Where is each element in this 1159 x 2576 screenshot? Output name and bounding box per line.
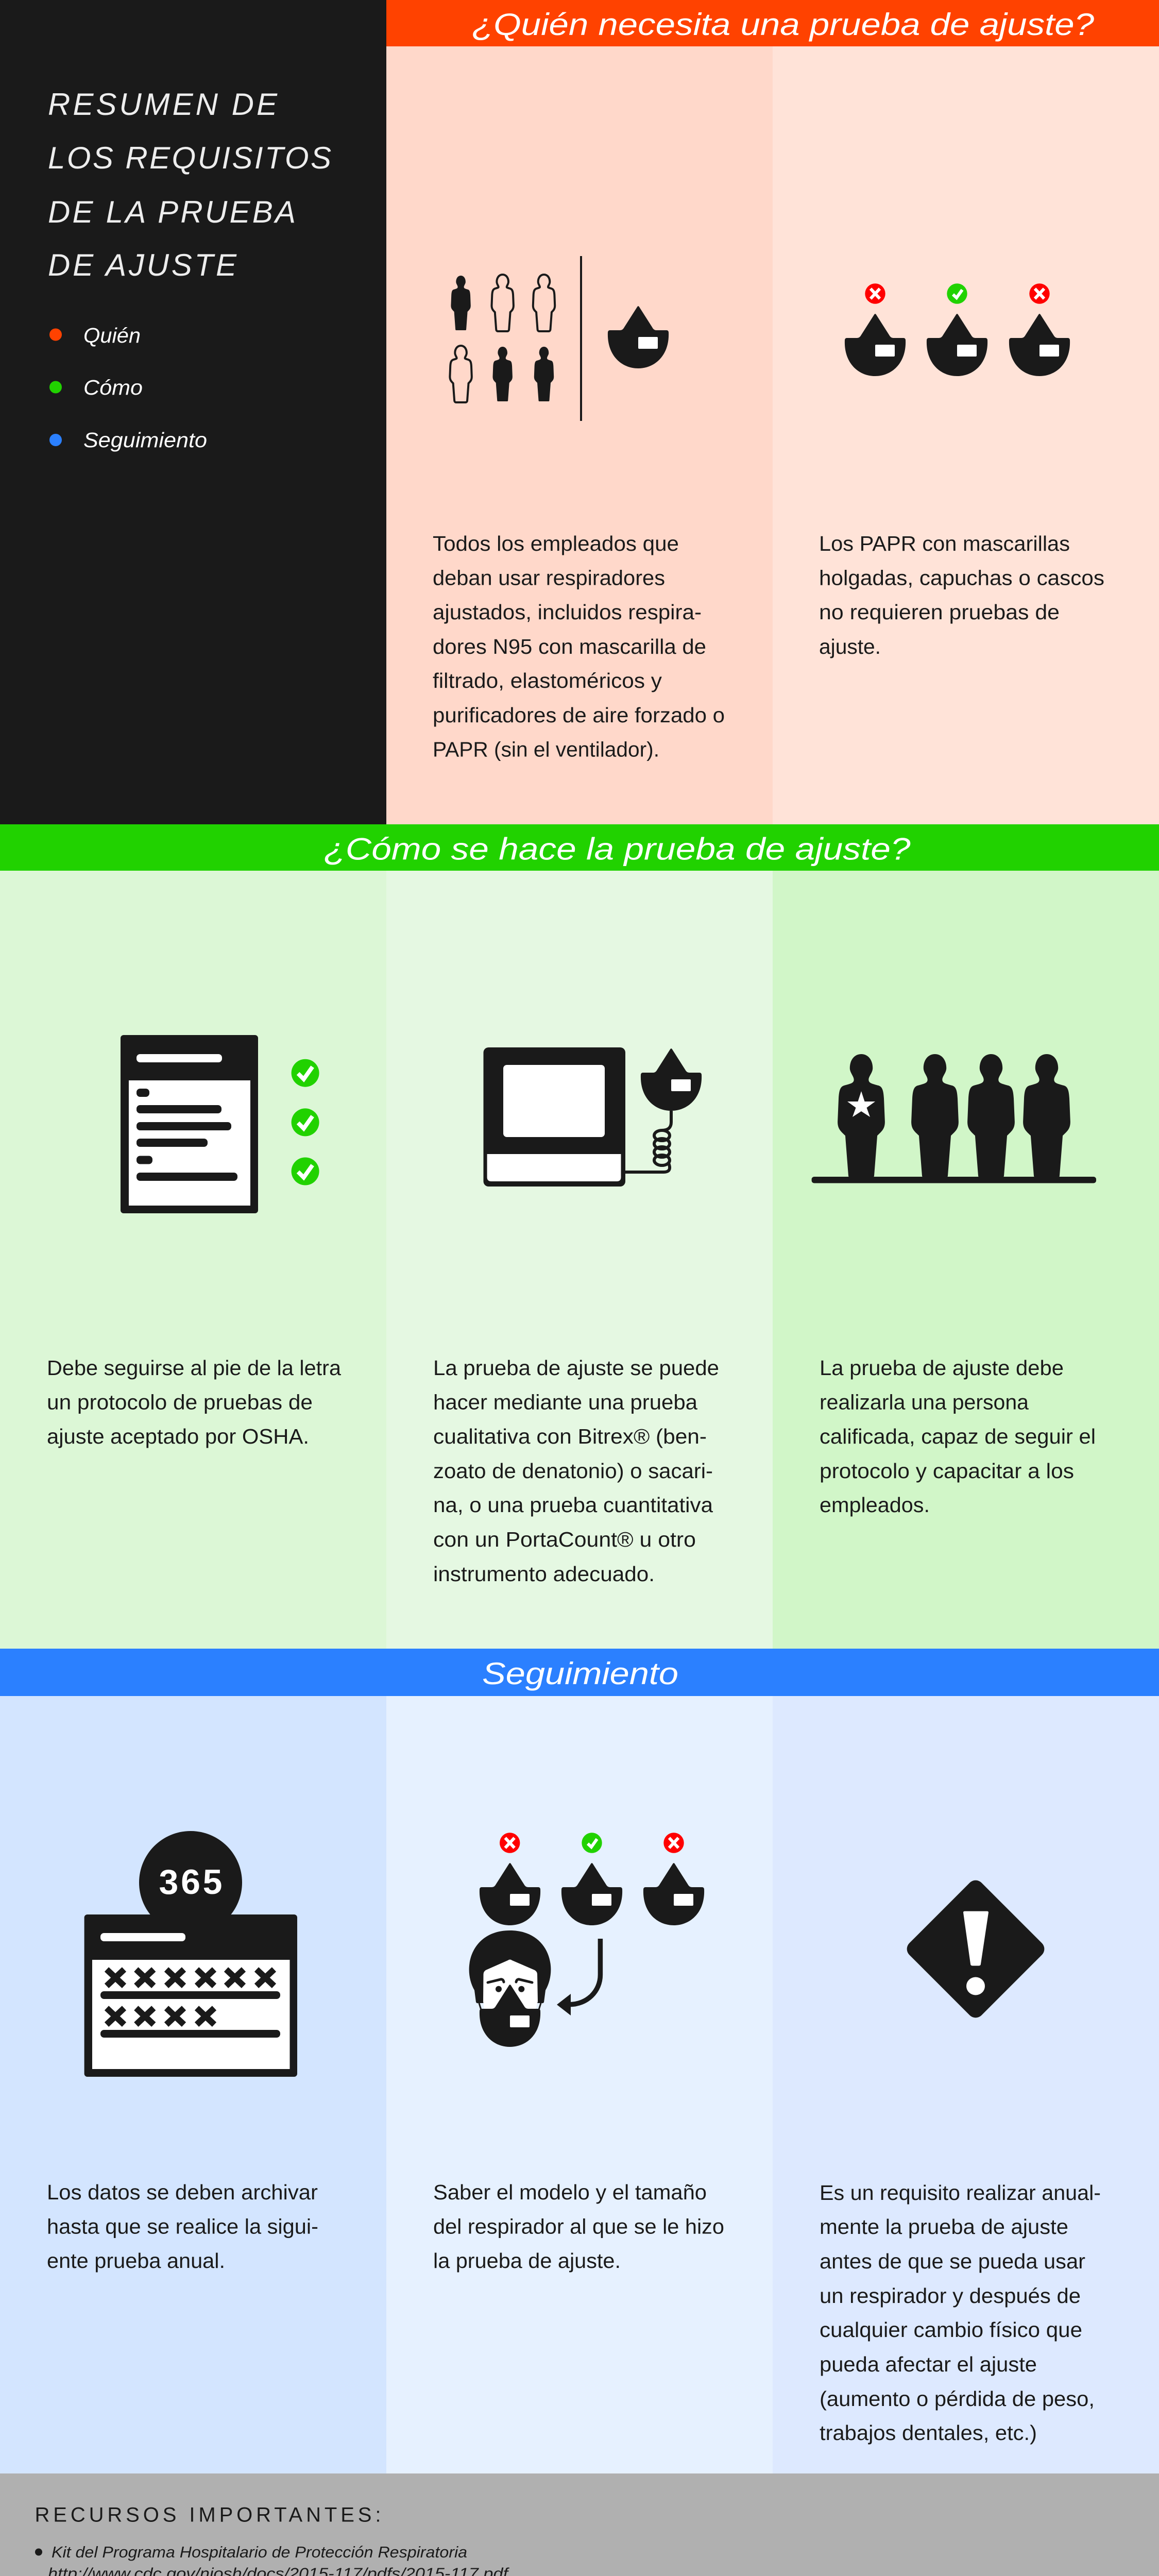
icon: respirator mask <box>608 306 669 368</box>
panel: persona calificada <box>773 871 1159 1649</box>
resource 1 <box>35 2543 510 2576</box>
text: PAPR <box>819 532 1104 658</box>
sidebar title: DE LA PRUEBA <box>48 195 296 229</box>
text: todos los empleados <box>433 532 725 761</box>
text: protocolo <box>47 1356 341 1448</box>
text: registros <box>47 2180 318 2273</box>
text: todos los empleados: PAPR (sin el ventilador). <box>433 738 659 761</box>
icon: three masks and face wearing the fitted mask <box>469 1833 704 2047</box>
text: requisito anual: pueda afectar el ajuste <box>820 2352 1037 2376</box>
text: modelo: la prueba de ajuste. <box>433 2249 621 2273</box>
text: registros: ente prueba anual. <box>47 2249 225 2273</box>
panel: métodos de prueba <box>386 871 773 1649</box>
panel: PAPR exentos <box>773 46 1159 824</box>
resource 1: Kit del Programa Hospitalario de Protección Respiratoria <box>52 2543 467 2561</box>
text: todos los empleados: Todos los empleados que <box>433 532 679 555</box>
panel: sidebar summary <box>0 0 386 824</box>
text: PAPR: ajuste. <box>819 635 881 658</box>
text: todos los empleados: dores N95 con mascarilla de <box>433 635 706 658</box>
text: registros: hasta que se realice la sigui- <box>47 2215 318 2239</box>
heading band: Quién <box>386 0 1159 46</box>
text: métodos: na, o una prueba cuantitativa <box>433 1493 713 1517</box>
text: métodos: con un PortaCount® u otro <box>433 1528 696 1551</box>
text: persona calificada <box>820 1356 1096 1517</box>
text: persona calificada: La prueba de ajuste debe <box>820 1356 1064 1380</box>
icon: warning diamond <box>904 1877 1048 2021</box>
sidebar title: DE AJUSTE <box>48 248 237 282</box>
text: protocolo: un protocolo de pruebas de <box>47 1391 313 1414</box>
text: requisito anual: (aumento o pérdida de peso, <box>820 2387 1095 2411</box>
icon: six workers, three wearing respirators <box>451 276 554 401</box>
text: persona calificada: protocolo y capacitar a los <box>820 1459 1074 1483</box>
panel: recursos importantes <box>0 2473 1159 2576</box>
text: protocolo: ajuste aceptado por OSHA. <box>47 1425 309 1448</box>
legend: Quién: Quién <box>83 324 141 347</box>
text: registros: Los datos se deben archivar <box>47 2180 318 2204</box>
text: todos los empleados: filtrado, elastoméricos y <box>433 669 662 692</box>
icon: checklist document <box>121 1035 319 1213</box>
legend: Seguimiento: Seguimiento <box>83 428 207 452</box>
icon: 365 calendar: 365 <box>159 1862 223 1902</box>
text: requisito anual: mente la prueba de ajuste <box>820 2215 1068 2239</box>
heading band: Cómo <box>0 824 1159 871</box>
sidebar title <box>48 87 331 282</box>
text: modelo: del respirador al que se le hizo <box>433 2215 724 2239</box>
text: requisito anual <box>820 2181 1101 2445</box>
panel: requisito anual <box>773 1696 1159 2473</box>
text: todos los empleados: deban usar respiradores <box>433 566 665 590</box>
panel: registros <box>0 1696 386 2473</box>
text: métodos: hacer mediante una prueba <box>433 1391 697 1414</box>
icon: qualified leader with star and three workers <box>812 1054 1096 1183</box>
sidebar title: RESUMEN DE <box>48 87 278 122</box>
icon: 365 calendar <box>84 1831 297 2077</box>
text: PAPR: no requieren pruebas de <box>819 600 1060 624</box>
text: métodos: La prueba de ajuste se puede <box>433 1356 719 1380</box>
panel: modelo y tamaño <box>386 1696 773 2473</box>
text: métodos: zoato de denatonio) o sacari- <box>433 1459 713 1483</box>
text: requisito anual: Es un requisito realizar anual- <box>820 2181 1101 2205</box>
text: todos los empleados: purificadores de aire forzado o <box>433 703 725 727</box>
text: modelo: Saber el modelo y el tamaño <box>433 2180 707 2204</box>
arrow: selected mask to face <box>557 1939 600 2015</box>
text: requisito anual: trabajos dentales, etc.) <box>820 2421 1037 2445</box>
legend: Quién <box>49 324 141 347</box>
text: todos los empleados: ajustados, incluidos respira- <box>433 600 702 624</box>
text: protocolo: Debe seguirse al pie de la letra <box>47 1356 341 1380</box>
text: PAPR: holgadas, capuchas o cascos <box>819 566 1104 590</box>
text: persona calificada: realizarla una persona <box>820 1391 1029 1414</box>
text: persona calificada: empleados. <box>820 1493 930 1517</box>
text: métodos: instrumento adecuado. <box>433 1562 655 1586</box>
text: requisito anual: cualquier cambio físico que <box>820 2318 1082 2342</box>
icon: three masks with marks <box>845 283 1070 376</box>
text: requisito anual: antes de que se pueda usar <box>820 2249 1085 2273</box>
text: métodos: cualitativa con Bitrex® (ben- <box>433 1425 707 1448</box>
legend: Cómo <box>49 376 143 399</box>
text: persona calificada: calificada, capaz de seguir el <box>820 1425 1096 1448</box>
heading band: Quién: ¿Quién necesita una prueba de ajuste? <box>472 7 1095 42</box>
panel: todos los empleados <box>386 46 773 824</box>
heading: recursos: RECURSOS IMPORTANTES: <box>35 2504 381 2527</box>
text: modelo <box>433 2180 724 2273</box>
sidebar title: LOS REQUISITOS <box>48 141 331 175</box>
heading band: Seguimiento: Seguimiento <box>482 1656 678 1691</box>
text: PAPR: Los PAPR con mascarillas <box>819 532 1070 555</box>
text: métodos <box>433 1356 719 1586</box>
panel: protocolo OSHA <box>0 871 386 1649</box>
heading band: Seguimiento <box>0 1649 1159 1696</box>
icon: fit test machine with mask and hose <box>483 1047 702 1187</box>
heading band: Cómo: ¿Cómo se hace la prueba de ajuste? <box>323 832 911 867</box>
legend: Cómo: Cómo <box>83 376 143 399</box>
text: requisito anual: un respirador y después de <box>820 2284 1081 2308</box>
